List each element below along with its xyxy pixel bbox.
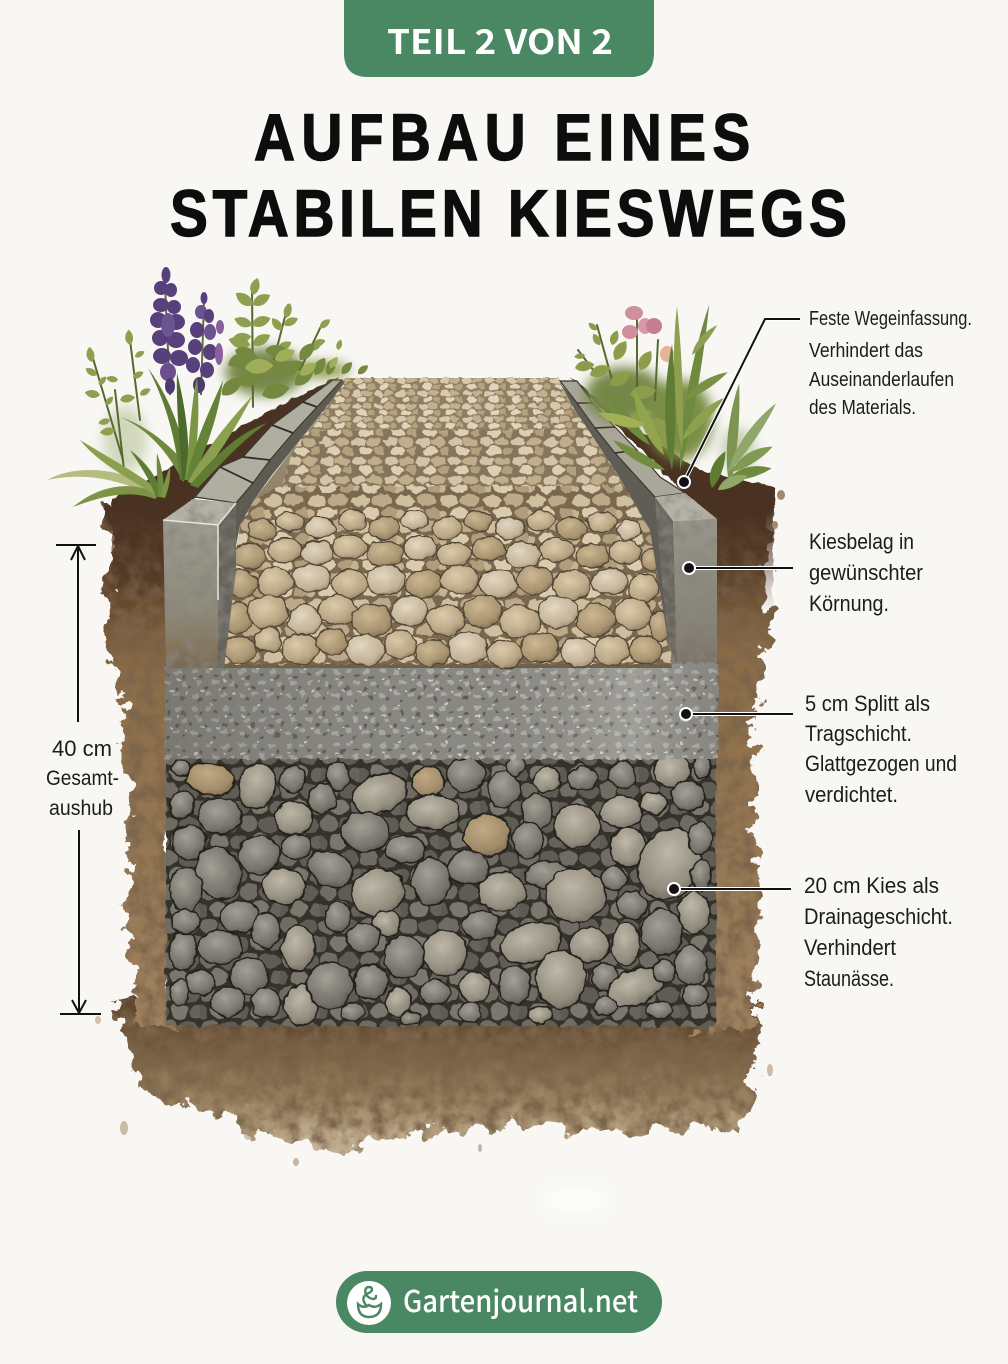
stems	[92, 285, 323, 470]
leaves	[84, 277, 370, 437]
footer brand pill: Gartenjournal.net	[403, 1277, 638, 1321]
dimension: total excavation depth: Gesamt-	[46, 767, 119, 790]
title	[170, 101, 847, 251]
annotation: drainage layer: Verhindert	[804, 935, 897, 960]
drainage layer	[166, 752, 716, 1026]
annotation: drainage layer: Staunässe.	[804, 966, 894, 991]
layer base fill behind joints	[167, 640, 716, 770]
right front curb	[655, 493, 717, 664]
right leaves	[574, 321, 675, 449]
footer brand pill	[336, 1271, 662, 1333]
annotation: curb edge: Feste Wegeinfassung.	[809, 308, 972, 330]
annotation: curb edge: des Materials.	[809, 397, 916, 419]
left plants	[47, 267, 370, 507]
annotation: split layer: Glattgezogen und	[805, 751, 957, 776]
gravel path surface	[220, 378, 672, 668]
annotation: curb edge	[678, 308, 972, 488]
annotation: split layer: Tragschicht.	[805, 721, 912, 746]
right curb stones	[560, 381, 717, 664]
foliage shade	[103, 348, 350, 474]
dimension: total excavation depth: aushub	[49, 797, 113, 820]
soil splatter	[95, 490, 785, 1166]
drainage stones	[169, 755, 712, 1025]
soil cross-section	[106, 475, 770, 1150]
annotation: drainage layer	[668, 873, 953, 991]
part badge: TEIL 2 VON 2	[387, 15, 613, 64]
lupin flowers	[150, 267, 224, 395]
stems	[578, 320, 658, 400]
split layer	[165, 663, 718, 759]
annotation: gravel surface: Körnung.	[809, 591, 889, 616]
annotation: gravel surface	[683, 529, 923, 616]
annotation: split layer: 5 cm Splitt als	[805, 691, 930, 716]
annotation: drainage layer: Drainageschicht.	[804, 904, 953, 929]
annotation: split layer: verdichtet.	[805, 782, 898, 807]
annotation: gravel surface: gewünschter	[809, 560, 923, 585]
annotation: curb edge: Verhindert das	[809, 340, 923, 362]
title: STABILEN KIESWEGS	[170, 177, 847, 251]
grass blades	[47, 368, 267, 507]
dimension: total excavation depth	[46, 545, 119, 1014]
part badge	[344, 0, 654, 77]
foliage shade	[585, 367, 756, 472]
annotation: curb edge: Auseinanderlaufen	[809, 369, 954, 391]
faint paper highlight	[545, 1188, 609, 1212]
annotation: split layer	[680, 691, 957, 807]
annotation: drainage layer: 20 cm Kies als	[804, 873, 939, 898]
title: AUFBAU EINES	[254, 101, 750, 175]
right plants	[574, 303, 779, 493]
gravel stones near	[221, 510, 670, 668]
pink flowers	[622, 306, 674, 362]
left curb stones	[163, 380, 345, 668]
gravel pattern far	[222, 378, 672, 664]
annotation: gravel surface: Kiesbelag in	[809, 529, 914, 554]
icon: plant logo	[347, 1281, 391, 1325]
left front curb	[163, 499, 236, 668]
dimension: total excavation depth: 40 cm	[52, 736, 112, 761]
dark soil behind curbs	[112, 376, 775, 610]
